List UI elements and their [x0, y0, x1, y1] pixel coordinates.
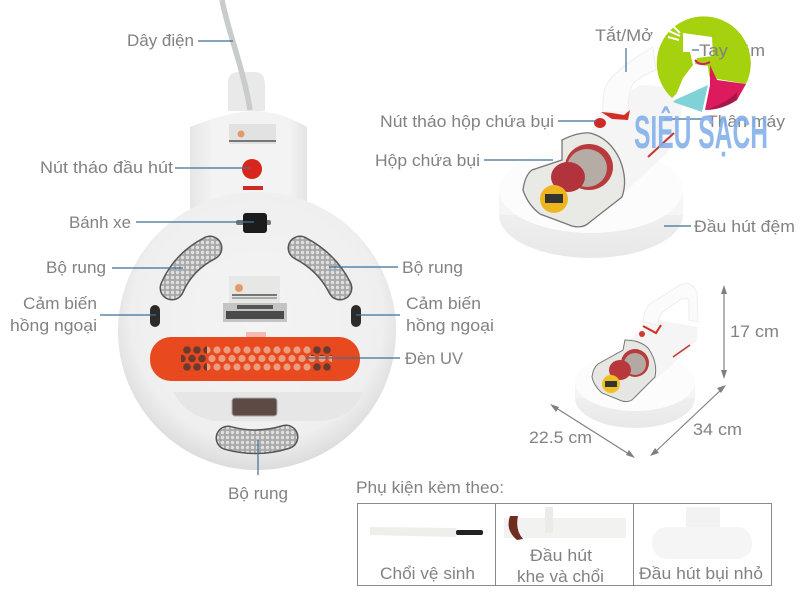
head top [575, 353, 695, 411]
label: Cảm biến hồng ngoại right: Cảm biến [406, 295, 481, 313]
label: Thân máy: Thân máy [707, 113, 786, 131]
cell: small nozzle [639, 507, 763, 583]
label: Đầu hút đệm: Đầu hút đệm [694, 218, 795, 236]
power cord [222, 0, 250, 110]
arrow: width [550, 404, 635, 458]
cell: crevice tool: Đầu hút [530, 547, 592, 565]
logo cloth [705, 65, 746, 110]
red release button [242, 159, 262, 179]
label: Bộ rung left: Bộ rung [46, 259, 106, 277]
vacuum dimensions view [575, 284, 698, 428]
label: Bộ rung bottom: Bộ rung [228, 485, 288, 503]
neck label [229, 124, 276, 144]
cell: brush: Chổi vệ sinh [380, 565, 475, 583]
accessories heading: Phụ kiện kèm theo: [356, 479, 504, 497]
infrared sensor right [351, 305, 361, 327]
label: 22.5 cm: 22.5 cm [529, 429, 592, 447]
label: Dây điện: Dây điện [127, 32, 194, 50]
red band [643, 325, 661, 333]
label: Bánh xe: Bánh xe [69, 214, 131, 232]
UV lamp [150, 337, 360, 381]
vibrating pad bottom [228, 437, 286, 442]
logo green circle [657, 16, 751, 98]
handle red band [601, 110, 630, 120]
infrared sensor left [150, 305, 160, 327]
label: 34 cm: 34 cm [693, 421, 742, 439]
dimension arrows [550, 285, 727, 458]
arrow: height [721, 285, 727, 379]
cell: crevice tool: khe và chổi [517, 568, 604, 586]
wheel [236, 213, 271, 233]
neck [190, 111, 307, 215]
vacuum main perspective view [499, 47, 683, 258]
mattress head side [499, 172, 683, 258]
body [630, 320, 698, 380]
label: Nút tháo đầu hút: Nút tháo đầu hút [40, 159, 173, 177]
suction slot recess [173, 392, 363, 421]
label: Hộp chứa bụi: Hộp chứa bụi [375, 152, 480, 170]
label: Nút tháo hộp chứa bụi: Nút tháo hộp chứa bụi [380, 113, 554, 131]
cell: brush [370, 527, 483, 583]
accessories table [358, 504, 772, 586]
handle [643, 284, 698, 325]
filter [565, 144, 613, 190]
motor body [590, 85, 682, 194]
dust box release button [594, 118, 606, 128]
logo blue label [673, 85, 708, 112]
handle [228, 72, 265, 111]
label: Tắt/Mở: Tắt/Mở [595, 26, 653, 45]
dust container [523, 133, 625, 227]
barcode [223, 303, 287, 322]
logo bottle [673, 33, 713, 112]
logo spray [668, 25, 680, 40]
callout leader lines [100, 41, 703, 475]
vibrating pad right [300, 248, 340, 288]
label: Tay over bottle [692, 42, 729, 60]
round base [118, 192, 396, 470]
red accent line [648, 133, 674, 157]
product sticker [229, 276, 280, 305]
arrow: length [650, 385, 726, 456]
yellow sticker [540, 185, 568, 213]
label: Tay cầm: Tay cầm [699, 42, 765, 60]
small pink tab [246, 332, 266, 338]
cell: small nozzle: Đầu hút bụi nhỏ [639, 565, 763, 583]
handle [603, 47, 656, 112]
label: Tay over bottle: Tay [699, 42, 729, 60]
label: Cảm biến hồng ngoại right: hồng ngoại [406, 317, 494, 335]
dust box [592, 340, 656, 402]
mattress head top [499, 147, 683, 233]
logo collar [695, 60, 710, 64]
cell: crevice tool [504, 507, 626, 586]
label: Cảm biến hồng ngoại left: hồng ngoại [10, 317, 97, 335]
logo: Siêu Sạch [634, 16, 768, 158]
vacuum bottom view [118, 0, 396, 470]
label: Cảm biến hồng ngoại right [406, 295, 494, 335]
head side [575, 368, 695, 428]
label: 17 cm: 17 cm [730, 323, 779, 341]
vibrating pad left [172, 248, 210, 288]
yellow sticker [602, 375, 620, 393]
label: Đèn UV: Đèn UV [405, 350, 463, 368]
label: Cảm biến hồng ngoại left: Cảm biến [23, 295, 97, 313]
label: Cảm biến hồng ngoại left [10, 295, 97, 335]
label: Bộ rung right: Bộ rung [402, 259, 463, 277]
suction window [232, 398, 277, 416]
